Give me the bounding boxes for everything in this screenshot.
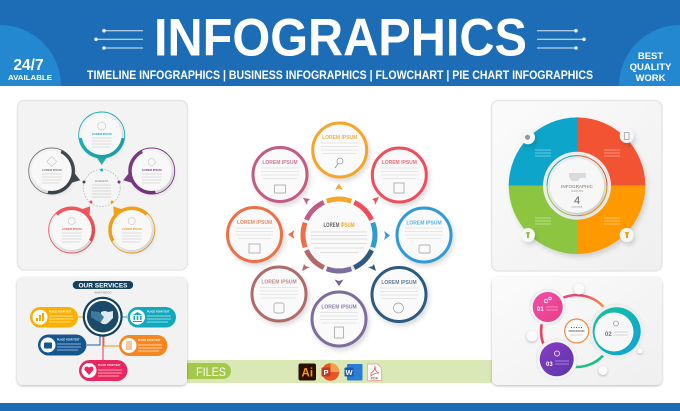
files strip xyxy=(187,360,492,383)
floating bubbles xyxy=(526,284,642,375)
heading: WHAT WE DO xyxy=(95,290,111,294)
icon: word xyxy=(344,364,362,380)
step: charcoal: LOREM IPSUM xyxy=(42,168,62,172)
center medallion: TEMPLATE xyxy=(571,190,584,193)
decorative lines: left xyxy=(95,29,143,49)
step: amber xyxy=(95,192,155,253)
step circle: blue: LOREM IPSUM xyxy=(406,220,442,226)
step circle: red: LOREM IPSUM xyxy=(382,160,417,166)
service: yellow: PLACE YOUR TEXT xyxy=(49,310,72,314)
step circle: plum: LOREM IPSUM xyxy=(262,160,298,166)
step circle: blue xyxy=(397,208,451,262)
badge: 24/7 available xyxy=(0,25,61,86)
badge: best quality work xyxy=(619,25,680,86)
service: teal xyxy=(128,307,176,328)
step circle: purple: LOREM IPSUM xyxy=(321,304,357,310)
step 03 xyxy=(536,339,577,380)
files label: FILES xyxy=(196,367,226,379)
step circle: top: LOREM IPSUM xyxy=(322,135,357,141)
badge: 24/7 available: AVAILABLE xyxy=(8,73,52,82)
icon: powerpoint: P xyxy=(323,368,329,377)
files label xyxy=(187,363,231,379)
step: charcoal xyxy=(29,148,87,202)
icon: word: W xyxy=(345,368,353,377)
step: purple xyxy=(116,148,175,202)
step: red: LOREM IPSUM xyxy=(62,227,82,231)
icon: illustrator: Ai xyxy=(302,368,313,380)
decorative lines: right xyxy=(537,29,585,49)
step: red xyxy=(49,192,108,253)
panel: three-step circles xyxy=(492,277,662,385)
heading xyxy=(73,281,133,294)
step: teal: LOREM IPSUM xyxy=(92,132,112,136)
badge: best quality work: BEST xyxy=(638,51,663,62)
icon: illustrator xyxy=(298,364,316,380)
option icons xyxy=(521,129,634,242)
step circle: orange: LOREM IPSUM xyxy=(237,220,272,226)
segment labels xyxy=(535,150,620,224)
header banner xyxy=(0,0,680,86)
service: orange: PLACE YOUR TEXT xyxy=(138,339,161,342)
title: INFOGRAPHICS xyxy=(154,9,527,68)
center node: INFOGRAPHIC xyxy=(569,330,585,333)
center hub xyxy=(82,168,120,206)
hub: handshake xyxy=(83,297,123,337)
step circle: brown xyxy=(252,267,306,321)
chart: central ring xyxy=(303,199,375,271)
donut chart xyxy=(509,117,645,254)
service: teal: PLACE YOUR TEXT xyxy=(147,310,170,314)
icon glyphs xyxy=(525,132,629,238)
ring segments xyxy=(303,199,375,271)
service: orange xyxy=(119,335,168,356)
ring label: LOREM IPSUM xyxy=(324,222,354,229)
step circle: purple xyxy=(312,292,366,346)
connecting ring xyxy=(541,295,606,367)
step circle: brown: LOREM IPSUM xyxy=(261,280,297,286)
panel: four-part donut xyxy=(492,100,662,271)
connectors xyxy=(78,317,127,360)
step 02 xyxy=(589,303,645,359)
service: blue xyxy=(38,334,86,356)
step circle: navy xyxy=(372,268,426,322)
step: purple: LOREM IPSUM xyxy=(142,168,162,172)
step 02: 02 xyxy=(605,332,612,338)
service: blue: PLACE YOUR TEXT xyxy=(57,338,80,342)
center medallion: INFOGRAPHIC xyxy=(561,184,594,189)
arrows around ring xyxy=(288,184,390,286)
ring body text xyxy=(311,232,367,252)
step 01 xyxy=(530,289,566,325)
panel: five-step cycle xyxy=(18,100,188,270)
step 03: 03 xyxy=(546,362,553,368)
step 01: 01 xyxy=(537,307,544,313)
subtitle: TIMELINE INFOGRAPHICS | BUSINESS INFOGRAPHICS | FLOWCHART | PIE CHART INFOGRAPHICS xyxy=(87,69,593,82)
service: pink: PLACE YOUR TEXT xyxy=(98,364,121,367)
center medallion: OPTIONS xyxy=(572,206,583,209)
center medallion: 4 xyxy=(574,195,580,207)
step: amber: LOREM IPSUM xyxy=(122,227,142,231)
step: teal xyxy=(79,112,125,165)
icon: powerpoint xyxy=(322,363,339,381)
step circle: top xyxy=(313,123,367,177)
center medallion xyxy=(543,152,611,220)
service: yellow xyxy=(30,307,78,328)
badge: best quality work: QUALITY xyxy=(630,62,672,73)
step circle: navy: LOREM IPSUM xyxy=(381,280,417,286)
icon: pdf xyxy=(368,364,382,380)
panel: our services xyxy=(17,277,187,385)
step circle: plum xyxy=(253,148,307,202)
badge: best quality work: WORK xyxy=(635,73,666,84)
badge: 24/7 available: 24/7 xyxy=(13,57,44,74)
center node xyxy=(565,319,589,343)
heading: OUR SERVICES xyxy=(78,283,128,290)
center hub: BUSINESS xyxy=(95,179,109,183)
step circle: red xyxy=(372,148,426,202)
step circle: orange xyxy=(228,208,282,262)
footer bar xyxy=(0,403,680,411)
service: pink xyxy=(79,360,128,381)
icon: pdf: PDF xyxy=(371,376,379,380)
